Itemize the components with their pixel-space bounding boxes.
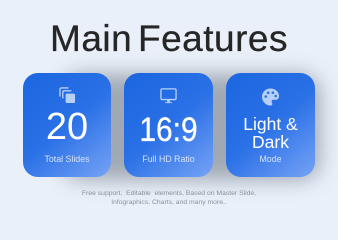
caption: Free support, Editable elements, Based on Master Slide, <box>82 190 256 196</box>
icon: palette <box>262 88 279 106</box>
label: Mode <box>259 154 282 164</box>
value: Dark <box>252 132 289 152</box>
title: Main Features <box>50 18 288 59</box>
value: Light & <box>243 114 298 134</box>
icon: stacked slides <box>59 87 76 103</box>
value: 16:9 <box>139 111 198 149</box>
panel: full hd ratio <box>124 73 213 177</box>
caption <box>82 190 256 206</box>
caption: Infographics, Charts, and many more.. <box>111 199 227 206</box>
value <box>243 114 298 152</box>
value: 20 <box>46 106 88 148</box>
panel: light and dark mode <box>226 73 315 177</box>
icon: monitor <box>160 88 177 104</box>
label: Full HD Ratio <box>142 154 195 164</box>
panel: total slides <box>23 73 111 177</box>
label: Total Slides <box>44 154 90 164</box>
